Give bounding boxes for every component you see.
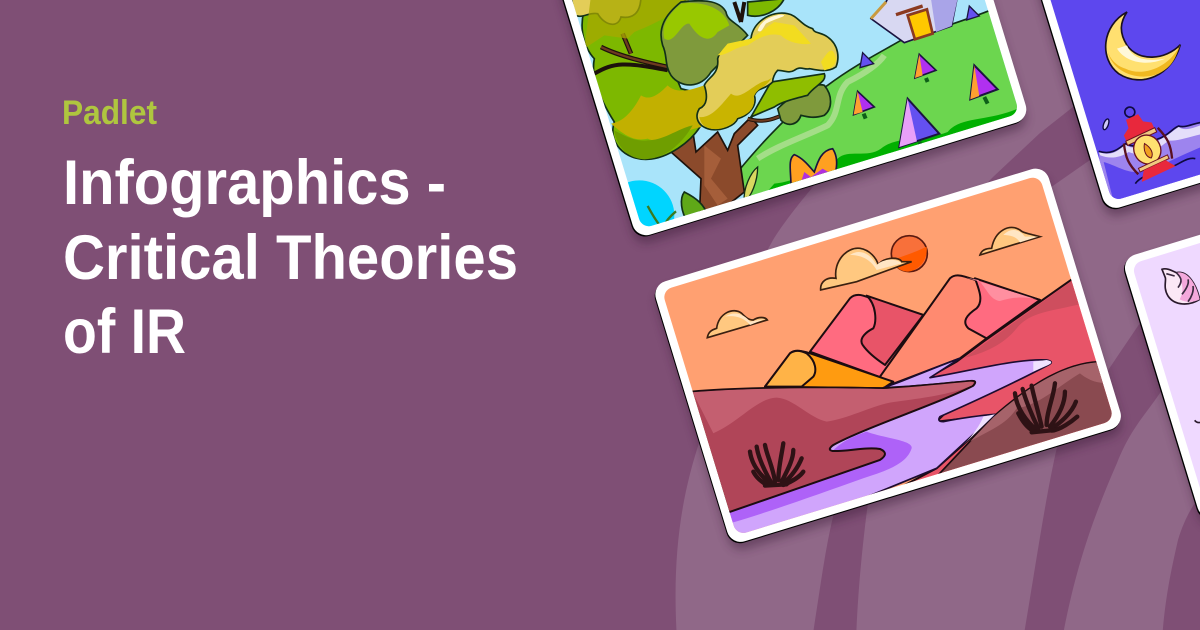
title: of IR <box>63 297 186 367</box>
card: moon and lantern illustration <box>1036 0 1200 219</box>
mountains <box>765 275 1040 388</box>
river <box>727 358 1051 538</box>
left foreground hill <box>692 381 975 512</box>
bush left <box>750 443 803 486</box>
right brown hill <box>938 361 1112 474</box>
title: Infographics - <box>63 148 446 218</box>
sky <box>664 178 1112 533</box>
logo: Padlet: Padlet <box>62 94 157 132</box>
background wave bands <box>676 0 1200 630</box>
right red hill <box>904 278 1112 484</box>
clouds <box>707 227 1040 338</box>
card: seashell illustration <box>1122 234 1200 522</box>
card: desert mountains illustration <box>654 168 1124 553</box>
title: Critical Theories <box>63 223 518 293</box>
sun <box>891 236 927 272</box>
bush right <box>1015 383 1077 432</box>
card: forest hill illustration <box>558 0 1030 246</box>
